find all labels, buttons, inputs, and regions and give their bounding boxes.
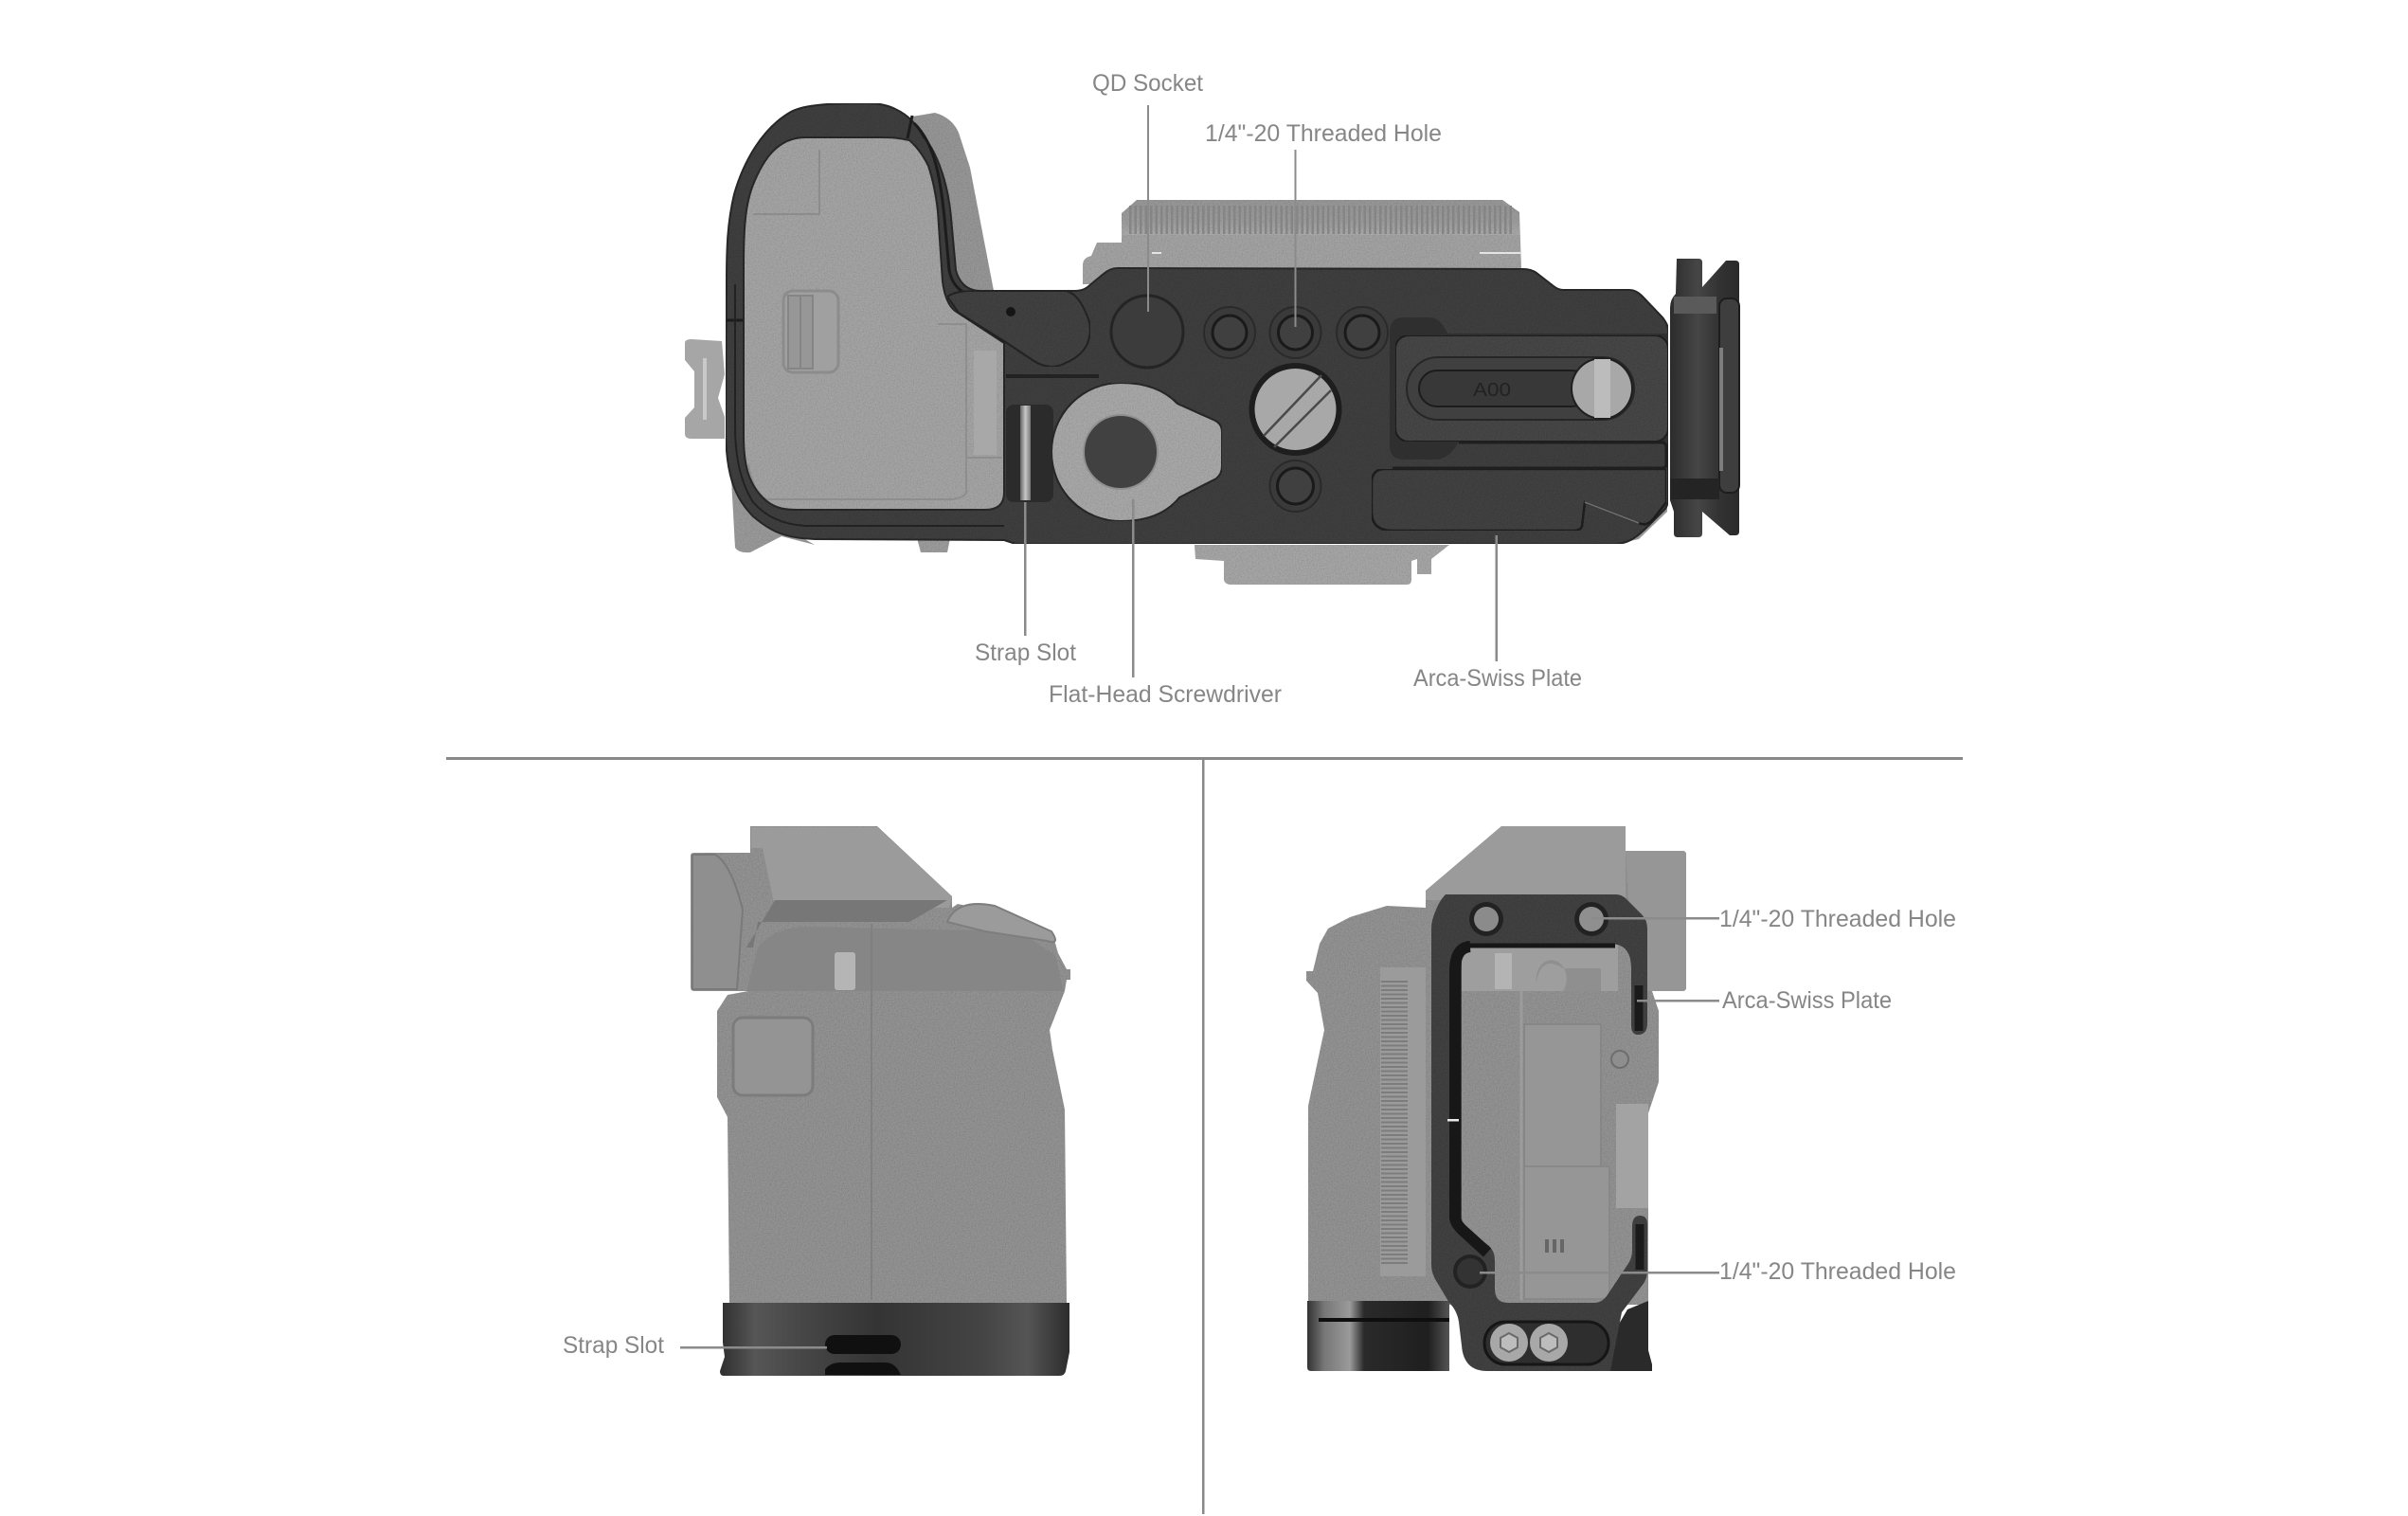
hump highlight [1426, 826, 1626, 900]
seam [871, 924, 872, 1300]
silver lug [1495, 953, 1512, 989]
viewfinder hump [751, 827, 952, 908]
leader: screwdriver [1132, 499, 1135, 677]
divider: vertical [1202, 758, 1205, 1514]
vertical seam [1519, 991, 1523, 1300]
small pin hole [1006, 307, 1015, 316]
right clamp [1670, 259, 1739, 537]
mode switch [1536, 960, 1601, 991]
leader: right top threaded hole [1591, 917, 1719, 919]
label: Arca-Swiss Plate: Arca-Swiss Plate [1413, 665, 1582, 692]
A00 marking: A00 [1473, 380, 1511, 401]
L-bracket plate [1431, 894, 1647, 1371]
hinge tube [1616, 1104, 1648, 1208]
QD socket [1111, 296, 1183, 368]
shoulder [746, 927, 1064, 991]
headphone door [733, 1018, 813, 1095]
threaded hole right [1337, 307, 1388, 358]
battery vents [1547, 1239, 1562, 1253]
rear upper area [1462, 944, 1618, 991]
label: top threaded hole: 1/4"-20 Threaded Hole [1205, 120, 1442, 147]
panel: right side view [1306, 826, 1686, 1371]
grip lower rim line [735, 284, 1004, 526]
battery door [744, 137, 1004, 510]
cage plate [726, 103, 1668, 544]
slotted screw [1249, 363, 1341, 456]
top dial [947, 904, 1055, 942]
grip seam and notch lines [727, 116, 971, 320]
camera rear body in grey [1306, 826, 1686, 1305]
Arca-Swiss plate recess [1372, 442, 1666, 531]
leader: right lower threaded hole [1480, 1272, 1719, 1273]
lower threaded hole [1453, 1254, 1487, 1289]
right catch [1611, 1051, 1628, 1068]
top-left threaded hole [1469, 902, 1503, 936]
label: QD Socket: QD Socket [1092, 70, 1203, 97]
groove below arm [1006, 374, 1099, 378]
grip dial [1380, 967, 1426, 1276]
inner left rail shadow [1455, 947, 1487, 1253]
label: right top threaded hole: 1/4"-20 Threaded Hole [1719, 906, 1956, 932]
knurled band [746, 900, 947, 948]
camera top body in grey [731, 113, 1667, 585]
silver lug [835, 952, 855, 990]
label: right Arca-Swiss Plate: Arca-Swiss Plate [1722, 987, 1892, 1014]
knurled dial ridges [1129, 206, 1514, 234]
leader: left strap slot [680, 1346, 827, 1349]
leader: top threaded hole [1294, 150, 1296, 327]
right slot shadow [1639, 985, 1640, 1270]
flat-head screwdriver [1051, 383, 1222, 521]
divider: horizontal [446, 757, 1963, 760]
rear panel [1462, 991, 1613, 1304]
leader: QD socket [1147, 105, 1149, 312]
lower door [1524, 1166, 1609, 1299]
leader: arca plate [1495, 535, 1498, 661]
camera side body in grey [691, 826, 1070, 1303]
leader: strap slot [1024, 502, 1027, 636]
lower threaded hole [1269, 460, 1321, 512]
label: left Strap Slot: Strap Slot [563, 1332, 664, 1359]
panel: top view of camera with cage [685, 103, 1739, 585]
threaded hole centre [1269, 307, 1321, 358]
strap slot [1006, 405, 1053, 502]
grip arm pad [947, 291, 1090, 367]
door panel [1524, 1024, 1601, 1166]
panel: left side view [691, 826, 1070, 1376]
hex screw right [1530, 1324, 1568, 1362]
eyecup [1626, 851, 1686, 991]
adjustment slot [1484, 1322, 1608, 1364]
threaded hole left [1204, 307, 1255, 358]
hex screw left [1490, 1324, 1528, 1362]
label: Flat-Head Screwdriver: Flat-Head Screwdriver [1049, 681, 1282, 708]
strap slot upper [825, 1335, 901, 1354]
grip knurl [1381, 981, 1408, 1265]
label: Strap Slot: Strap Slot [975, 640, 1076, 666]
strap lug on left [685, 339, 725, 439]
top-right threaded hole [1574, 902, 1608, 936]
strap slot lower [825, 1363, 901, 1375]
rail tick [1447, 1119, 1459, 1122]
sliding plate [1390, 317, 1668, 460]
white dial glints [1152, 252, 1520, 254]
L-bracket base [1307, 1301, 1652, 1371]
label: right lower threaded hole: 1/4"-20 Threaded Hole [1719, 1258, 1956, 1285]
cage base [720, 1303, 1069, 1376]
inner top rail shadow [1468, 944, 1615, 948]
leader: right arca plate [1637, 1000, 1719, 1002]
eyecup [692, 855, 743, 989]
